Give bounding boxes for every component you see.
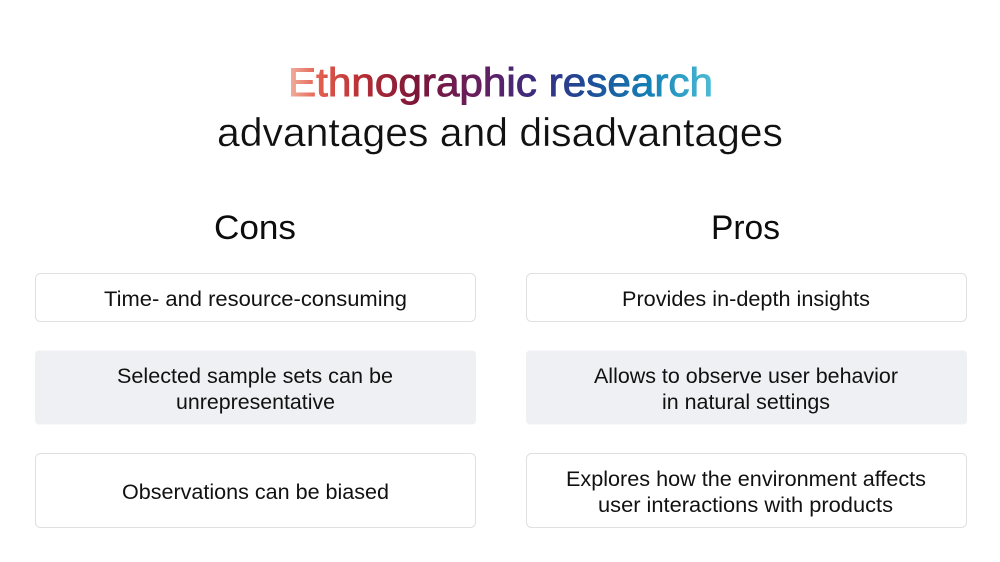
- card: time and resources: [36, 274, 476, 322]
- card: environment: [526, 454, 966, 528]
- heading: pros: Pros: [711, 209, 780, 247]
- title: [217, 61, 783, 155]
- heading: cons: Cons: [214, 209, 296, 247]
- card: environment: Explores how the environment affects: [566, 467, 926, 491]
- card: natural settings: in natural settings: [662, 390, 830, 414]
- card: insights: Provides in-depth insights: [622, 287, 870, 311]
- card: biased observations: [36, 454, 476, 528]
- title: advantages and disadvantages: [217, 111, 783, 155]
- card: natural settings: [526, 350, 967, 424]
- card: environment: user interactions with products: [598, 493, 893, 517]
- card: sample sets: unrepresentative: [176, 390, 335, 414]
- card: insights: [526, 274, 966, 322]
- card: time and resources: Time- and resource-consuming: [104, 287, 407, 311]
- card: natural settings: Allows to observe user behavior: [594, 364, 898, 388]
- card: sample sets: [35, 350, 476, 424]
- panel: cons: [35, 209, 476, 528]
- card: biased observations: Observations can be biased: [122, 480, 389, 504]
- panel: pros: [526, 209, 967, 528]
- title: Ethnographic research: [288, 61, 713, 105]
- card: sample sets: Selected sample sets can be: [117, 364, 393, 388]
